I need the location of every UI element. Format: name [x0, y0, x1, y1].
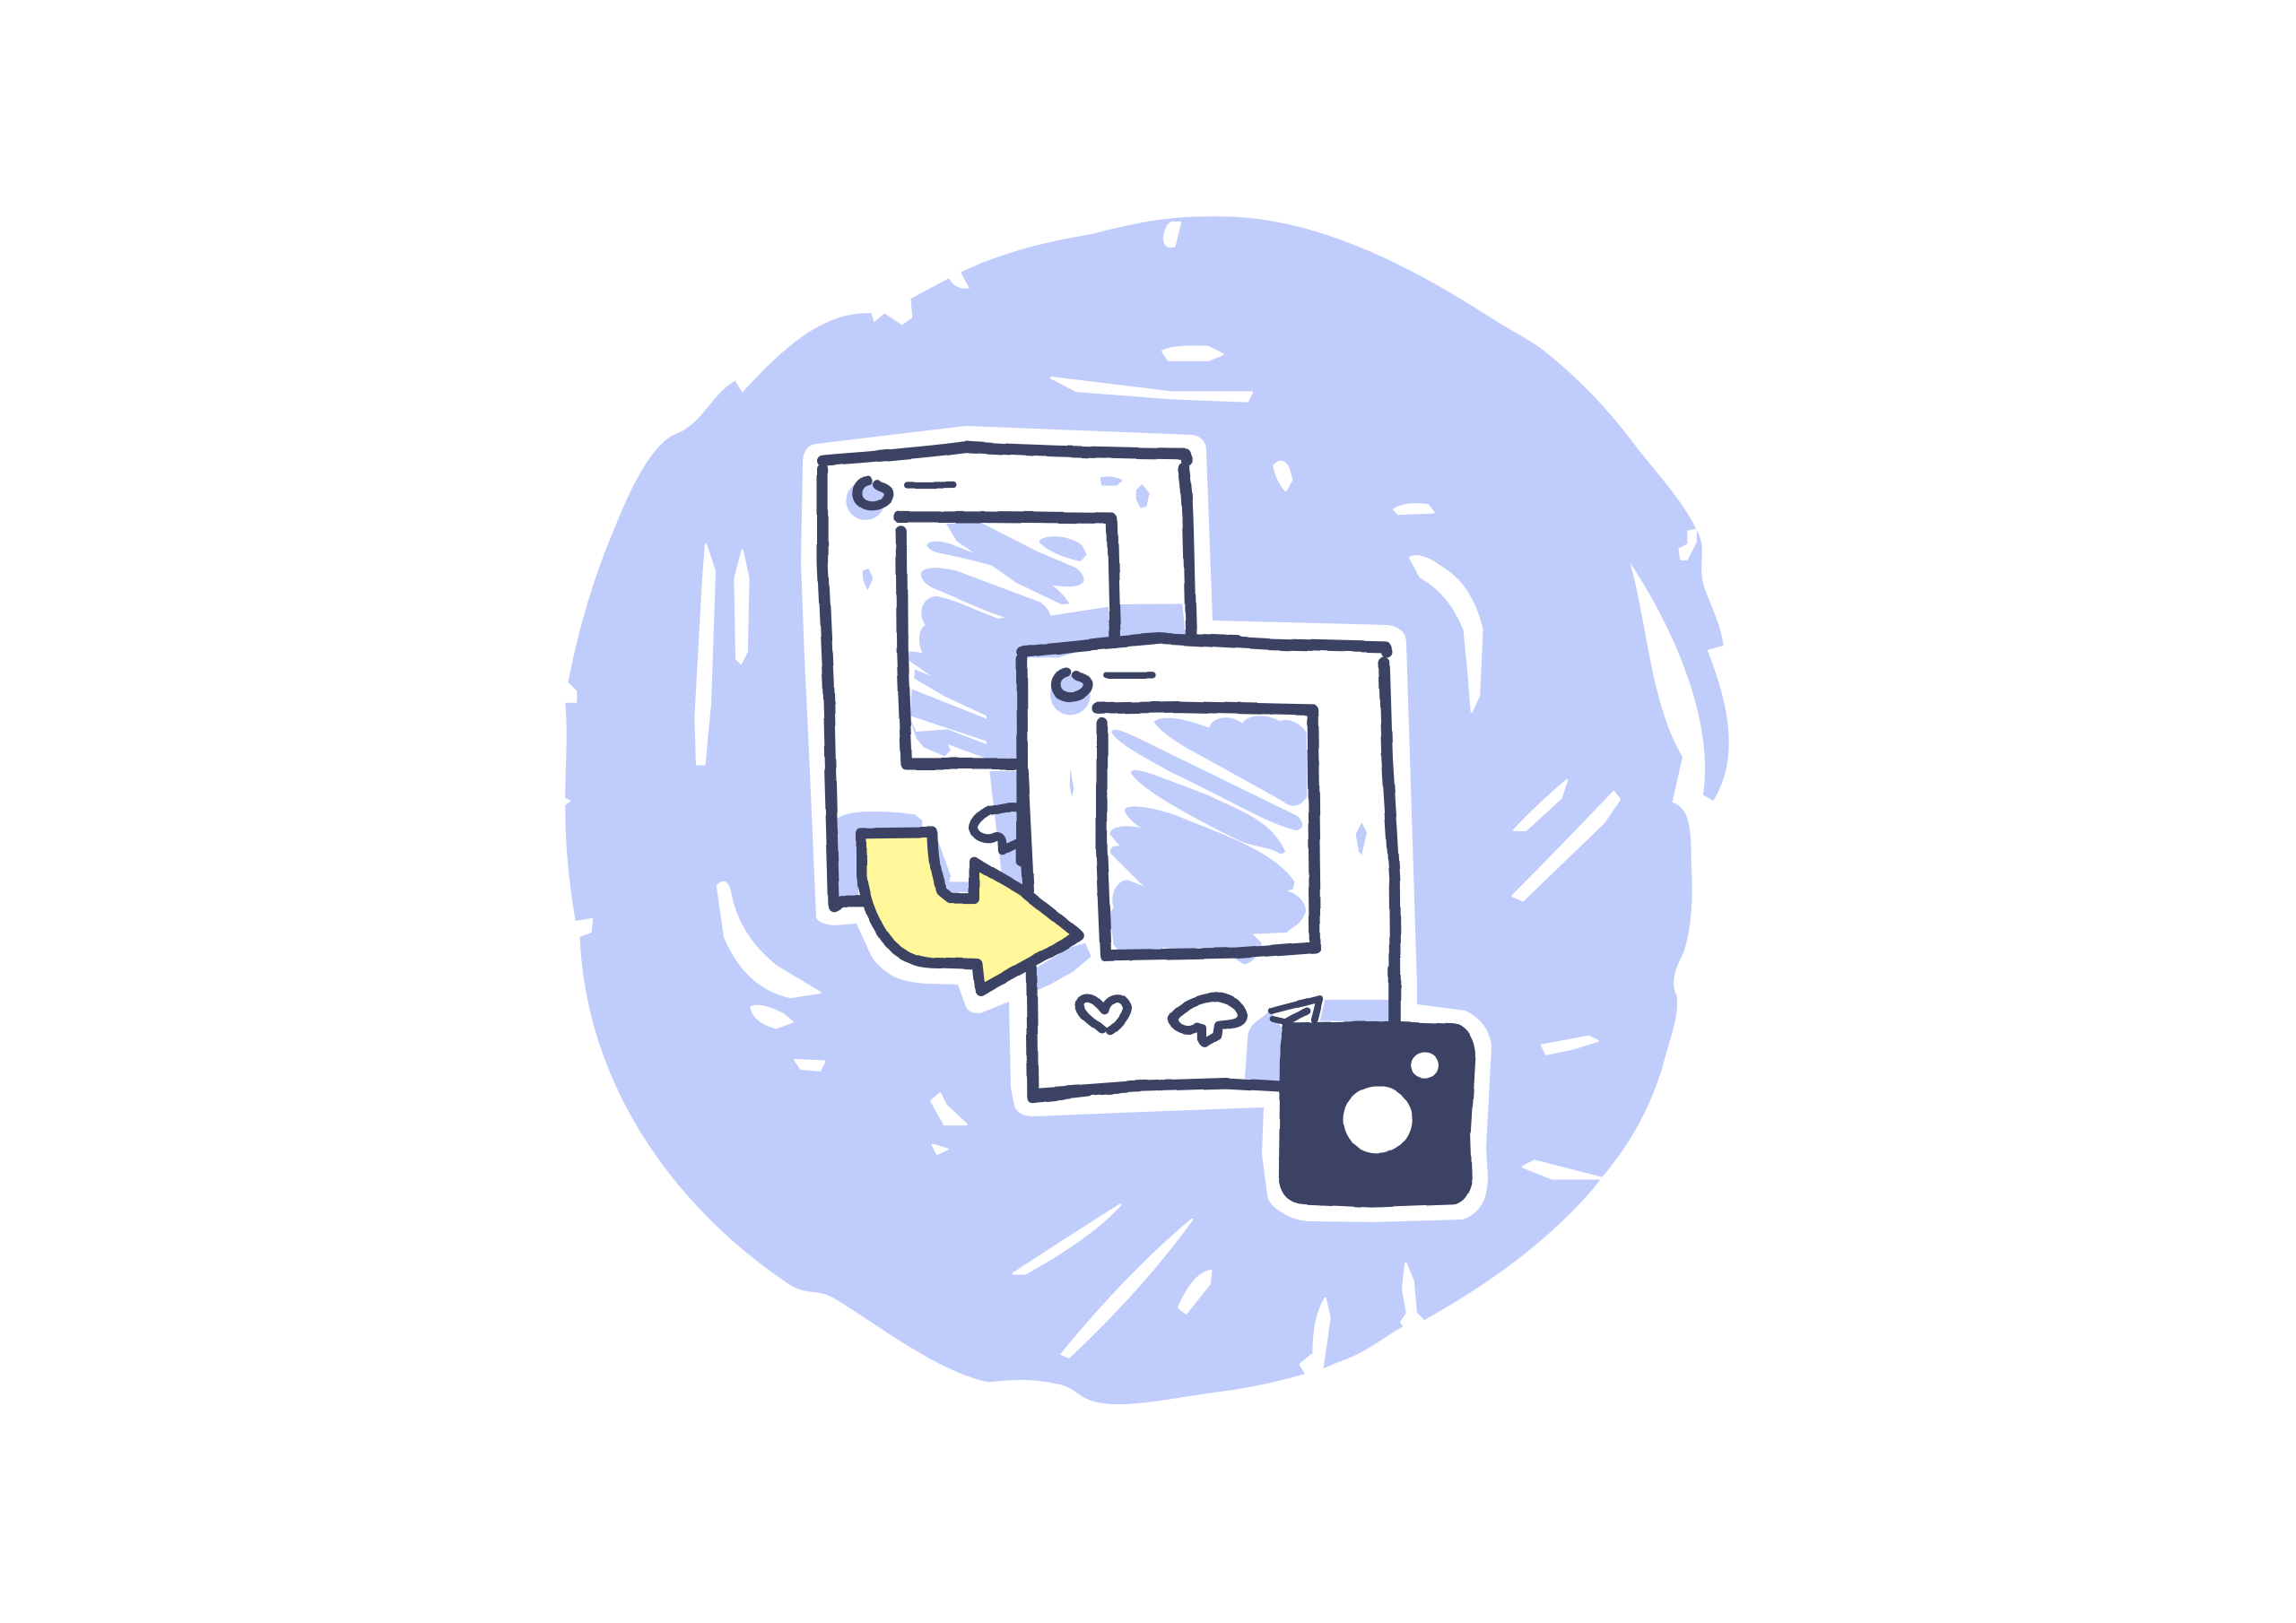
blue shading behind camera	[1245, 1000, 1390, 1082]
icon: heart	[1080, 998, 1127, 1031]
arrow	[862, 832, 1079, 991]
white halo behind posts	[801, 426, 1492, 1222]
blue shading around arrow	[837, 771, 1091, 990]
back post lower edge and comment icon	[830, 771, 1018, 906]
front post left edge	[1022, 771, 1029, 890]
icon: camera badge	[1278, 1020, 1475, 1208]
icon: share	[1272, 998, 1320, 1022]
front post blue scribble	[1070, 716, 1367, 964]
like, comment and share icons with camera badge	[1033, 968, 1475, 1208]
white brush marks	[696, 222, 1696, 1376]
front post frame	[1058, 638, 1396, 986]
navy line artwork	[822, 447, 1475, 1208]
icon: comment bubble	[1172, 997, 1243, 1043]
back post blue scribble	[846, 476, 1186, 759]
back post outline	[822, 447, 1191, 861]
front post lower edge	[1031, 968, 1088, 1097]
front post outline	[1022, 638, 1238, 861]
background blob	[565, 216, 1729, 1404]
